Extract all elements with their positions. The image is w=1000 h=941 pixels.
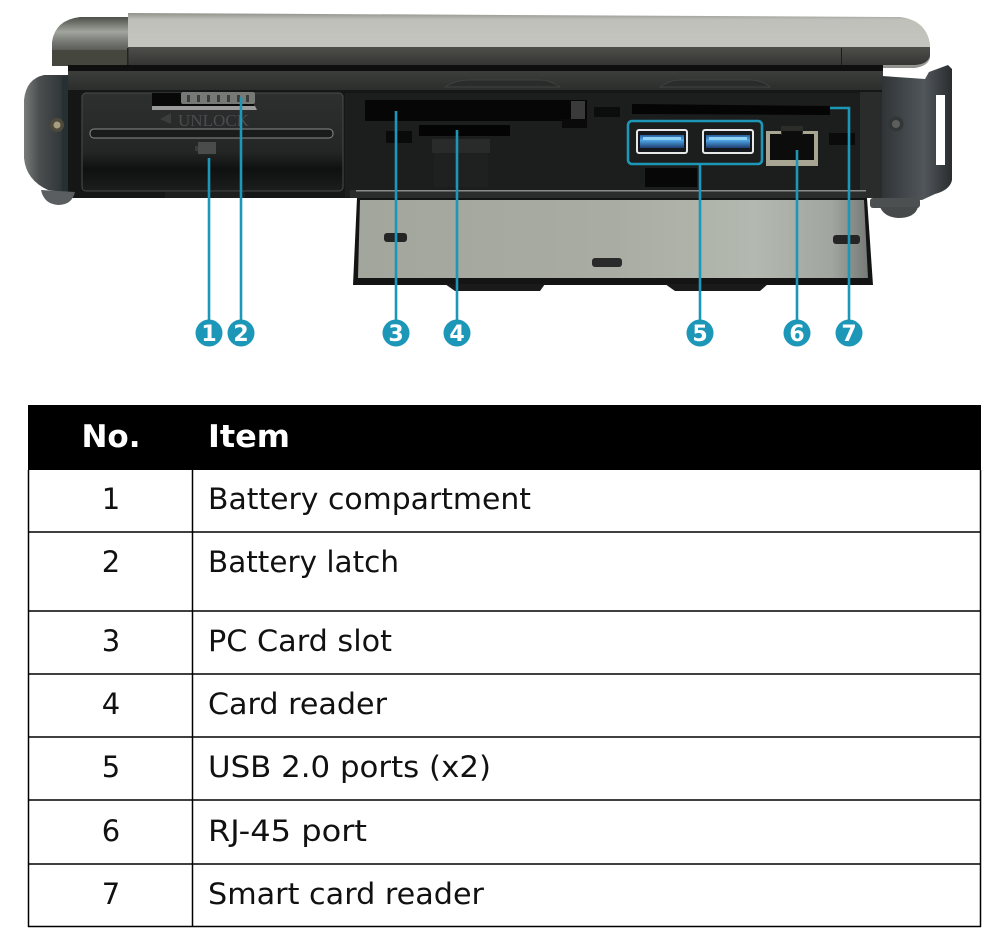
PC Card slot — [365, 100, 620, 143]
callout 3: 3 — [388, 322, 404, 347]
table header: No. — [81, 419, 141, 455]
RJ-45 port — [766, 126, 818, 166]
callout 2: 2 — [233, 322, 249, 347]
USB ports — [637, 130, 753, 187]
row 2: 2 — [102, 545, 120, 579]
row 6 — [102, 814, 367, 848]
table grid — [28, 470, 981, 927]
left bumper — [24, 75, 75, 205]
row 1: 1 — [102, 482, 120, 516]
row 5: 5 — [102, 750, 120, 784]
port door — [350, 190, 873, 291]
callout 7 — [836, 320, 862, 347]
right bumper with strap — [870, 65, 952, 218]
row 3 — [102, 624, 392, 658]
row 5 — [102, 750, 491, 784]
callout 6 — [784, 320, 810, 347]
battery compartment cover: UNLOCK — [178, 111, 250, 130]
row 4: Card reader — [208, 687, 387, 721]
row 7 — [102, 877, 484, 911]
row 7: 7 — [102, 877, 120, 911]
row 2 — [102, 545, 399, 579]
callout 3 — [382, 320, 410, 347]
smart card slot — [632, 104, 830, 115]
callout 5 — [686, 320, 714, 347]
table header — [28, 405, 981, 470]
laptop lid — [52, 13, 930, 71]
laptop photo — [24, 13, 952, 291]
parts table — [28, 405, 981, 927]
row 4 — [102, 687, 387, 721]
laptop body — [68, 71, 883, 198]
callout 7: 7 — [841, 322, 857, 347]
row 6: 6 — [102, 814, 120, 848]
row 7: Smart card reader — [208, 877, 484, 911]
row 5: USB 2.0 ports (x2) — [208, 750, 491, 784]
card reader slot — [419, 125, 510, 187]
callout 4 — [444, 320, 470, 347]
callout 1: 1 — [201, 322, 217, 347]
row 2: Battery latch — [208, 545, 399, 579]
battery compartment cover — [82, 92, 343, 198]
callout 5: 5 — [692, 322, 708, 347]
row 1: Battery compartment — [208, 482, 531, 516]
row 3: PC Card slot — [208, 624, 392, 658]
row 3: 3 — [102, 624, 120, 658]
table header: Item — [208, 419, 290, 455]
row 4: 4 — [102, 687, 120, 721]
callout 1 — [196, 320, 222, 347]
row 6: RJ-45 port — [208, 814, 367, 848]
callout leader lines and USB bracket — [209, 97, 849, 330]
callout 6: 6 — [789, 322, 805, 347]
callout 4: 4 — [449, 322, 465, 347]
callout 2 — [228, 320, 254, 347]
